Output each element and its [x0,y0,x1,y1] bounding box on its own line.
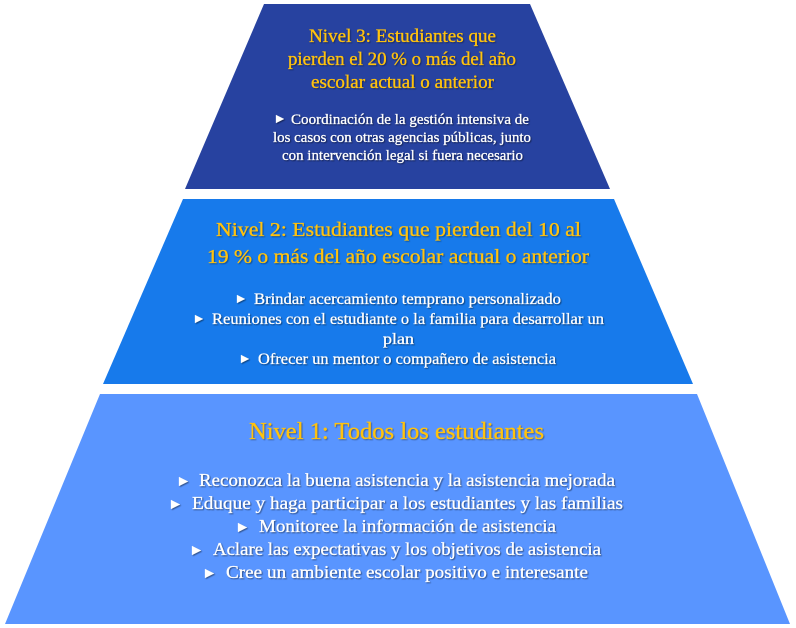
level 3 trapezoid [185,4,610,189]
level 3 bullet text: con intervención legal si fuera necesario [282,148,523,164]
level 3 heading: pierden el 20 % o más del año [288,50,516,70]
level 2 trapezoid [103,199,693,384]
level 1 bullet list [171,470,623,582]
level 3 bullet text: Coordinación de la gestión intensiva de [291,112,529,128]
panel: level 3 [185,4,610,189]
level 2 heading [207,219,589,268]
panel: level 1 [5,394,790,624]
level 2 bullet list: plan [383,331,414,348]
level 2 bullet list: Ofrecer un mentor o compañero de asistencia [258,351,556,368]
level 3 bullet text: los casos con otras agencias públicas, junto [273,130,531,146]
level 2 heading: 19 % o más del año escolar actual o anterior [207,246,589,268]
level 2 bullet list [195,291,604,368]
level 3 bullet text [273,112,531,164]
level 2 heading: Nivel 2: Estudiantes que pierden del 10 al [216,219,581,241]
level 1 bullet list: Reconozca la buena asistencia y la asistencia mejorada [199,470,615,490]
level 3 heading: Nivel 3: Estudiantes que [309,27,496,47]
level 3 heading [288,27,516,93]
level 1 trapezoid [5,394,790,624]
level 1 bullet list: Aclare las expectativas y los objetivos de asistencia [213,539,601,559]
panel: level 2 [103,199,693,384]
level 1 bullet list: Cree un ambiente escolar positivo e interesante [226,562,588,582]
level 1 bullet list: Monitoree la información de asistencia [259,516,556,536]
level 3 heading: escolar actual o anterior [311,73,494,93]
level 2 bullet list: Reuniones con el estudiante o la familia para desarrollar un [212,311,604,328]
level 1 bullet list: Eduque y haga participar a los estudiantes y las familias [192,493,623,513]
level 1 heading: Nivel 1: Todos los estudiantes [249,419,544,445]
level 2 bullet list: Brindar acercamiento temprano personalizado [254,291,561,308]
